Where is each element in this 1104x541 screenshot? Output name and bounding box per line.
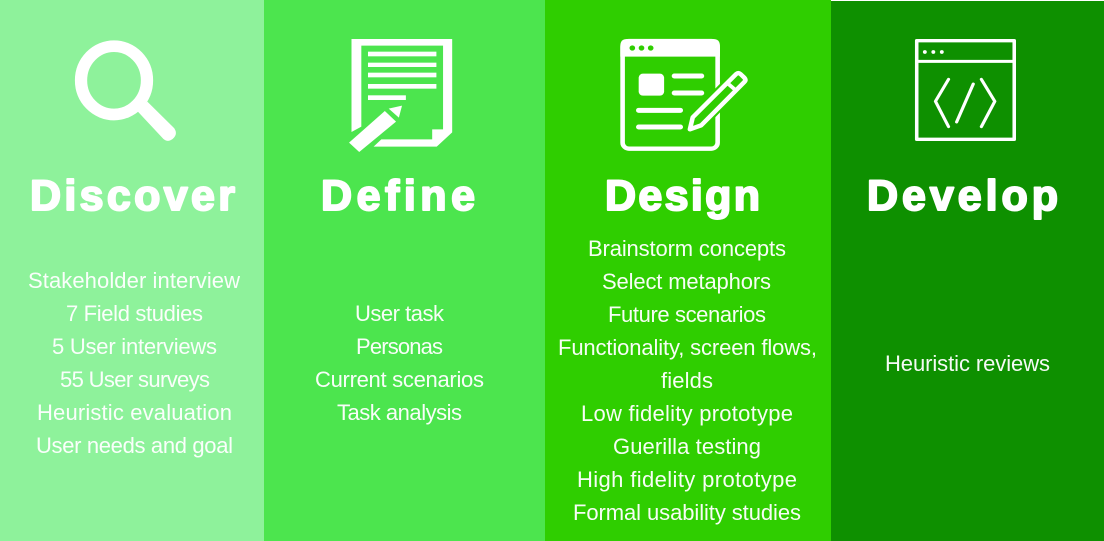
heading: discover: Discover [30,172,235,220]
panel: define [264,0,545,541]
icon: document and pencil [349,39,452,152]
heading: design: Design [605,172,760,220]
list: discover activities: 7 Field studies [66,301,203,326]
icon: magnifying glass [81,46,176,141]
list: define activities: Personas [356,334,443,359]
panel: develop [831,1,1104,541]
list: discover activities: 5 User interviews [52,334,217,359]
list: design activities: Select metaphors [602,269,771,294]
list: design activities: High fidelity prototype [577,467,797,492]
icon: code window [917,41,1014,139]
list: design activities: Low fidelity prototype [581,401,793,426]
list: design activities [558,236,817,525]
list: design activities: Guerilla testing [613,434,761,459]
list: discover activities: User needs and goal [36,433,233,458]
list: design activities: fields [661,368,713,393]
panel: design [545,0,831,541]
list: design activities: Formal usability studies [573,500,801,525]
heading: develop: Develop [867,172,1058,220]
list: discover activities: Stakeholder interview [28,268,240,293]
list: discover activities: 55 User surveys [60,367,210,392]
list: define activities: User task [355,301,445,326]
list: develop activities: Heuristic reviews [885,351,1050,376]
list: define activities: Current scenarios [315,367,484,392]
list: define activities: Task analysis [337,400,462,425]
heading: define: Define [321,172,475,220]
list: discover activities [28,268,240,458]
list: design activities: Future scenarios [608,302,766,327]
list: design activities: Brainstorm concepts [588,236,786,261]
panel: discover [0,0,264,541]
list: define activities [315,301,484,425]
icon: browser window and pencil [620,39,745,149]
list: design activities: Functionality, screen flows, [558,335,817,360]
list: discover activities: Heuristic evaluation [37,400,232,425]
